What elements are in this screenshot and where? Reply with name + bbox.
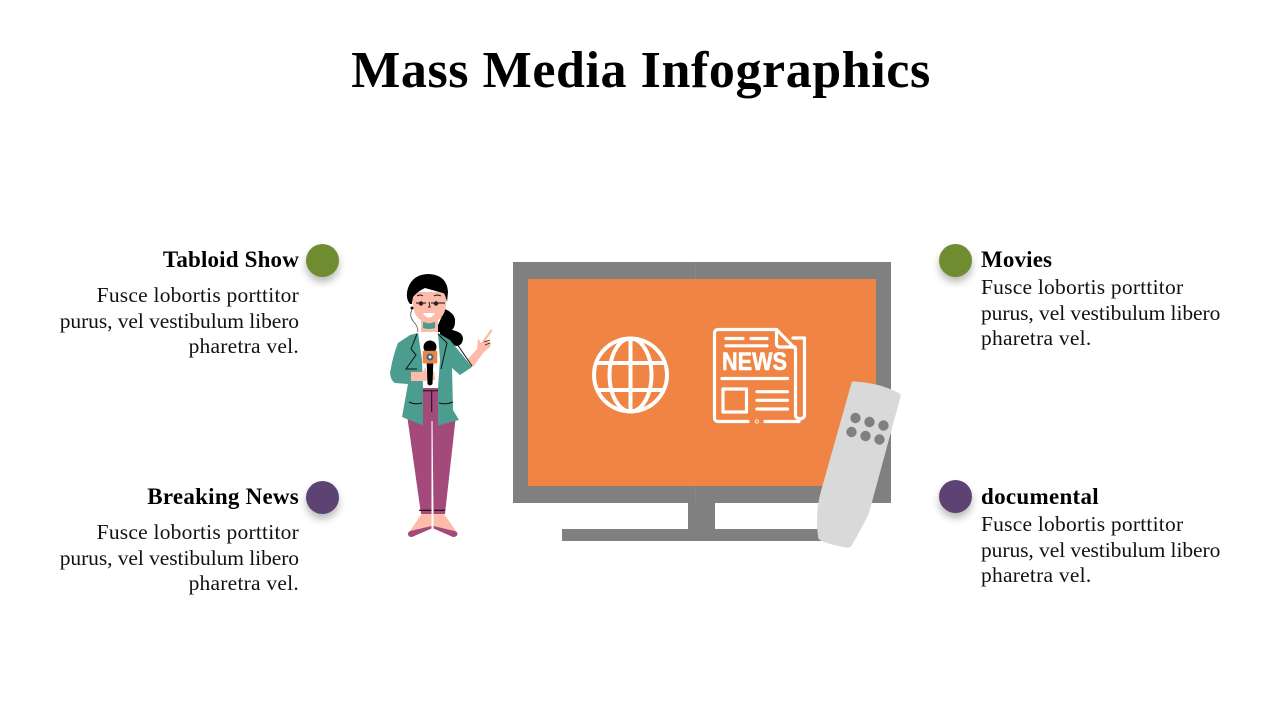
jacket	[390, 333, 472, 426]
collar	[423, 322, 435, 329]
panel: breaking news	[60, 481, 343, 595]
panel: movies	[935, 244, 1220, 350]
glasses, eyes and brows	[416, 295, 445, 307]
marker: green dot	[306, 244, 339, 277]
jacket details	[406, 334, 472, 404]
neck	[421, 318, 438, 332]
tv stand	[562, 500, 830, 541]
text: tabloid show body: pharetra vel.	[189, 334, 299, 358]
remote body	[817, 381, 901, 548]
icon: newspaper	[714, 330, 804, 422]
heading: tabloid show: Tabloid Show	[163, 247, 299, 272]
hair	[407, 274, 448, 304]
text: documental body: purus, vel vestibulum libero	[981, 538, 1220, 562]
earpiece wire	[410, 306, 414, 310]
text: tabloid show body: Fusce lobortis porttitor	[97, 283, 299, 307]
tv screen	[528, 279, 876, 486]
panel: documental	[935, 480, 1220, 587]
heading: breaking news: Breaking News	[147, 484, 299, 509]
text: documental body	[981, 512, 1220, 587]
remote control	[817, 381, 901, 548]
text: movies body: purus, vel vestibulum libero	[981, 300, 1220, 324]
text: movies body	[981, 275, 1220, 350]
text: breaking news body: purus, vel vestibulum libero	[60, 546, 299, 570]
text: movies body: pharetra vel.	[981, 326, 1091, 350]
marker: purple dot	[306, 481, 339, 514]
smile	[423, 313, 435, 318]
text: tabloid show body	[60, 283, 299, 358]
text: movies body: Fusce lobortis porttitor	[981, 275, 1183, 299]
reporter character	[390, 274, 492, 537]
text: documental body: Fusce lobortis porttitor	[981, 512, 1183, 536]
heading: documental: documental	[981, 484, 1099, 509]
ankles	[410, 514, 456, 531]
heading: movies: Movies	[981, 247, 1052, 272]
remote buttons	[846, 413, 889, 445]
tv frame	[513, 262, 891, 503]
text: breaking news body: pharetra vel.	[189, 571, 299, 595]
text: breaking news body: Fusce lobortis porttitor	[97, 520, 299, 544]
marker: green dot	[939, 244, 972, 277]
microphone	[423, 340, 437, 386]
television	[513, 262, 891, 541]
face	[413, 292, 446, 324]
text: documental body: pharetra vel.	[981, 563, 1091, 587]
icon text: news: NEWS	[722, 348, 787, 376]
panel: tabloid show	[60, 244, 343, 358]
shoes	[408, 526, 458, 537]
pointing hand	[467, 329, 492, 367]
belt line	[423, 391, 438, 412]
shirt	[418, 332, 441, 388]
marker: purple dot	[939, 480, 972, 513]
text: breaking news body	[60, 520, 299, 595]
text: tabloid show body: purus, vel vestibulum libero	[60, 308, 299, 332]
icon: globe	[594, 338, 667, 412]
trousers	[407, 415, 456, 514]
title: Mass Media Infographics	[351, 42, 931, 99]
hem lines	[419, 509, 445, 511]
holding hand	[411, 367, 435, 381]
hair ponytail	[435, 309, 463, 346]
